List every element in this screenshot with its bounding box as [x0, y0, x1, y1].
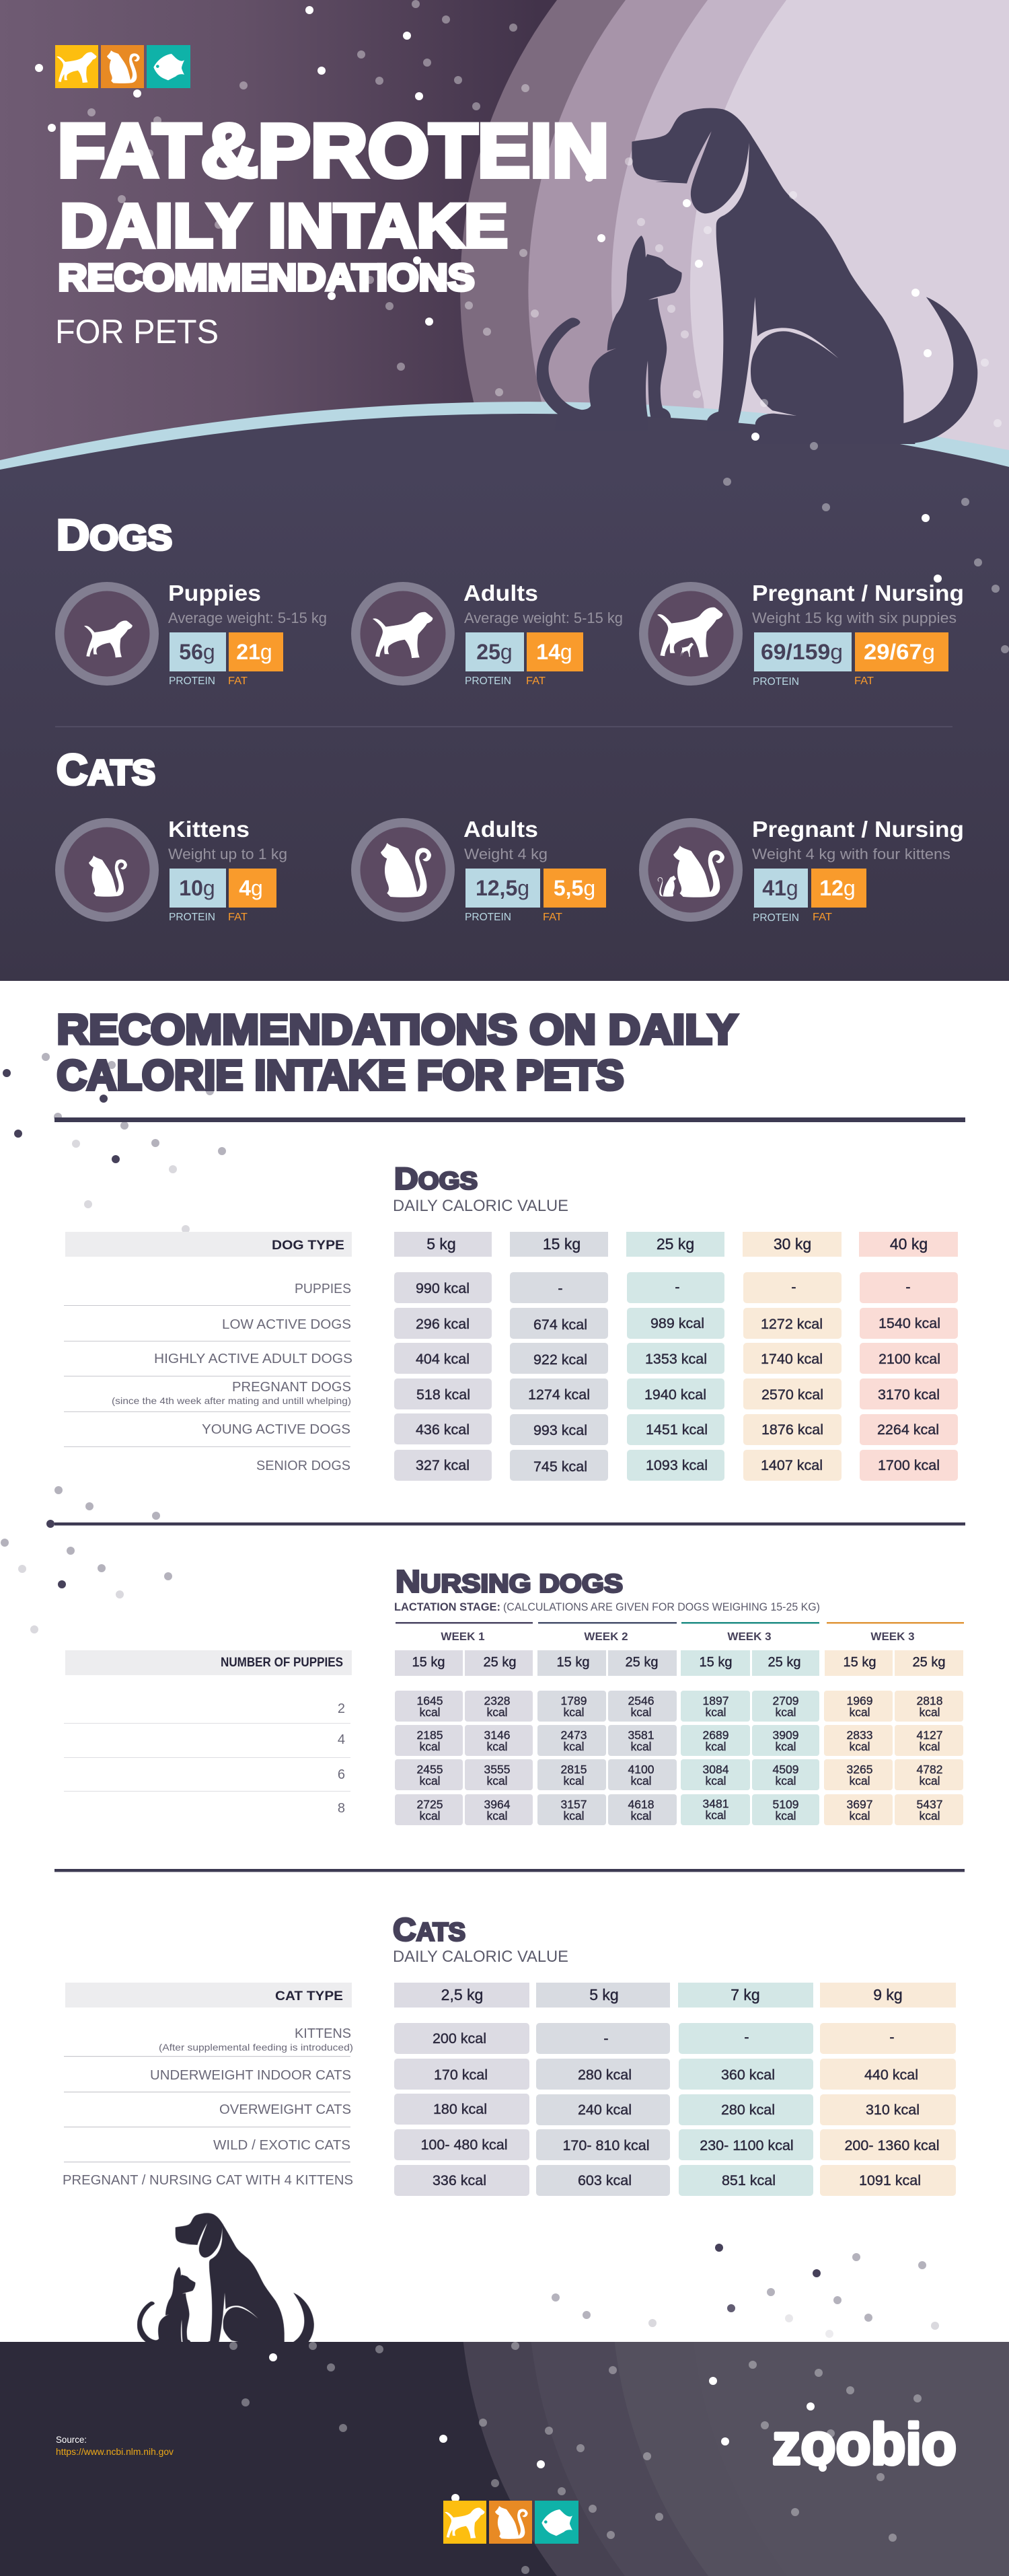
table: pregnant or nursing cat row: PREGNANT / NURSING CAT WITH 4 KITTENS	[63, 2173, 353, 2188]
table: four puppies row: 3909	[773, 1728, 798, 1742]
table: six puppies row: kcal	[775, 1774, 796, 1788]
table: six puppies row: kcal	[486, 1774, 508, 1788]
table: senior dogs row: 745 kcal	[533, 1459, 587, 1475]
table: four puppies row: 4	[338, 1732, 345, 1747]
table: wild and exotic cats row	[213, 2129, 956, 2160]
table: week headers: WEEK 3	[727, 1630, 772, 1643]
table: highly active adult dogs row	[154, 1343, 958, 1374]
table: dogs header row: 15 kg	[543, 1235, 581, 1253]
table: six puppies row: 4509	[773, 1763, 798, 1776]
snow dots on footer	[229, 2342, 922, 2574]
table: low active dogs row	[222, 1308, 958, 1339]
card: kittens: FAT	[228, 912, 248, 923]
table: eight puppies row: 5437	[917, 1798, 942, 1811]
card: adult dogs: 25g	[476, 640, 513, 664]
table: two puppies row: kcal	[419, 1705, 441, 1719]
table: senior dogs row: 1093 kcal	[646, 1457, 708, 1473]
table: dogs header row: 30 kg	[774, 1235, 811, 1253]
table: pregnant dogs row: PREGNANT DOGS	[232, 1380, 351, 1395]
card: pregnant or nursing cats: 12g	[819, 876, 856, 900]
logo: pet icon tiles	[55, 45, 190, 88]
heading: nursing dogs	[394, 1563, 820, 1613]
table: low active dogs row: 989 kcal	[650, 1315, 704, 1331]
panel: footer	[0, 2342, 1009, 2576]
source note: https://www.ncbi.nlm.nih.gov	[56, 2447, 174, 2457]
table: underweight indoor cats row: UNDERWEIGHT INDOOR CATS	[150, 2068, 351, 2083]
table: nursing dogs header row	[65, 1650, 963, 1676]
table: two puppies row: kcal	[630, 1705, 652, 1719]
heading: recommendations on daily calorie intake: CALORIE INTAKE FOR PETS	[57, 1052, 624, 1099]
card: puppies: FAT	[228, 675, 248, 687]
card: pregnant or nursing dogs: 29/67g	[864, 640, 935, 664]
table: eight puppies row: 3481	[703, 1797, 728, 1810]
card: adult cats	[351, 817, 606, 923]
table: two puppies row: 1897	[703, 1694, 728, 1707]
table: puppies row: -	[791, 1279, 796, 1295]
logo: zoobio wordmark: zoobio	[772, 2413, 957, 2477]
table: young active dogs row: 1451 kcal	[646, 1422, 708, 1438]
table: eight puppies row: kcal	[630, 1809, 652, 1823]
heading: cats table: CATS	[393, 1912, 465, 1948]
table: wild and exotic cats row: 200- 1360 kcal	[844, 2137, 940, 2154]
table: young active dogs row: YOUNG ACTIVE DOGS	[202, 1422, 350, 1437]
heading: recommendations on daily calorie intake: RECOMMENDATIONS ON DAILY	[57, 1006, 737, 1054]
card: pregnant or nursing cats: 41g	[762, 876, 798, 900]
table: eight puppies row: 4618	[628, 1798, 654, 1811]
card: kittens: 10g	[179, 876, 215, 900]
table: four puppies row: kcal	[563, 1740, 585, 1753]
table: two puppies row: 2818	[917, 1694, 942, 1707]
table: four puppies row	[338, 1725, 963, 1756]
table: six puppies row: 2455	[417, 1763, 443, 1776]
card: adult cats: 12,5g	[476, 876, 529, 900]
table: two puppies row: kcal	[563, 1705, 585, 1719]
table: low active dogs row: 674 kcal	[533, 1317, 587, 1333]
table: low active dogs row: LOW ACTIVE DOGS	[222, 1317, 351, 1332]
heading: recommendations on daily calorie intake	[57, 1006, 737, 1099]
table: nursing dogs header row: 15 kg	[557, 1655, 589, 1670]
table: wild and exotic cats row: WILD / EXOTIC CATS	[213, 2138, 350, 2153]
table: pregnant dogs row: 518 kcal	[416, 1387, 470, 1403]
heading: nursing dogs: NURSING DOGS	[396, 1563, 623, 1598]
card: adult dogs: PROTEIN	[465, 675, 511, 687]
title: for pets: FOR PETS	[55, 313, 219, 351]
table: four puppies row: kcal	[419, 1740, 441, 1753]
table: four puppies row: kcal	[705, 1740, 726, 1753]
table: nursing dogs header row: 25 kg	[768, 1655, 800, 1670]
table: dogs header row: 5 kg	[426, 1235, 456, 1253]
table: highly active adult dogs row: 2100 kcal	[879, 1351, 940, 1367]
table: underweight indoor cats row: 360 kcal	[721, 2067, 775, 2083]
card: kittens: PROTEIN	[169, 912, 215, 923]
table: cats header row: CAT TYPE	[275, 1989, 343, 2003]
card: adult cats: Adults	[463, 817, 538, 842]
card: adult dogs: FAT	[526, 675, 546, 687]
table: overweight cats row: 240 kcal	[578, 2102, 632, 2118]
title: daily intake: DAILY INTAKE	[60, 192, 508, 260]
panel: hero header	[0, 0, 1009, 484]
table: cats header row: 2,5 kg	[441, 1986, 483, 2003]
snow dots on white page	[1, 1053, 939, 2338]
table: nursing dogs header row: 25 kg	[484, 1655, 516, 1670]
card: adult dogs: 14g	[536, 640, 572, 664]
table: four puppies row: kcal	[630, 1740, 652, 1753]
table: pregnant or nursing cat row: 1091 kcal	[859, 2172, 921, 2188]
table: four puppies row: kcal	[849, 1740, 870, 1753]
table: kittens row	[159, 2023, 956, 2054]
table: highly active adult dogs row: 922 kcal	[533, 1352, 587, 1368]
table: dogs header row: 40 kg	[890, 1235, 928, 1253]
table: cats header row: 5 kg	[589, 1986, 619, 2003]
table: eight puppies row: 8	[338, 1801, 345, 1816]
table: four puppies row: 4127	[917, 1728, 942, 1742]
table: two puppies row: kcal	[849, 1705, 870, 1719]
table: puppies row: PUPPIES	[295, 1282, 351, 1296]
table: low active dogs row: 1272 kcal	[761, 1316, 823, 1332]
table: pregnant or nursing cat row: 603 kcal	[578, 2172, 632, 2188]
table: pregnant or nursing cat row: 336 kcal	[433, 2172, 486, 2188]
table: young active dogs row: 993 kcal	[533, 1422, 587, 1438]
table: six puppies row: 3555	[484, 1763, 510, 1776]
table: two puppies row: 1969	[847, 1694, 872, 1707]
source note: Source:	[56, 2435, 87, 2445]
table: puppies row: -	[675, 1279, 680, 1295]
heading: cats: CATS	[57, 745, 155, 794]
table: four puppies row: kcal	[919, 1740, 940, 1753]
table: nursing dogs header row: 15 kg	[844, 1655, 876, 1670]
heading: cats table	[393, 1912, 568, 1966]
table: senior dogs row: 1700 kcal	[878, 1457, 940, 1473]
table: young active dogs row: 1876 kcal	[761, 1422, 823, 1438]
logo: footer pet icon tiles	[443, 2501, 578, 2544]
card: pregnant or nursing dogs: PROTEIN	[753, 676, 799, 688]
heading: cats table: DAILY CALORIC VALUE	[393, 1948, 568, 1966]
heading: dogs table: DAILY CALORIC VALUE	[393, 1197, 568, 1215]
table: underweight indoor cats row: 440 kcal	[864, 2067, 918, 2083]
card: kittens: Kittens	[168, 817, 250, 842]
table: two puppies row: 2709	[773, 1694, 798, 1707]
table: eight puppies row: kcal	[849, 1809, 870, 1823]
table: overweight cats row: 180 kcal	[433, 2101, 487, 2117]
table: eight puppies row: 3157	[561, 1798, 587, 1811]
table: puppies row: -	[905, 1279, 911, 1295]
table: kittens row: 200 kcal	[433, 2030, 486, 2047]
table: eight puppies row: kcal	[775, 1809, 796, 1823]
table: eight puppies row: 2725	[417, 1798, 443, 1811]
table: two puppies row: kcal	[775, 1705, 796, 1719]
table: six puppies row: 3265	[847, 1763, 872, 1776]
table: six puppies row: kcal	[563, 1774, 585, 1788]
table: two puppies row: 1645	[417, 1694, 443, 1707]
card: pregnant or nursing cats: Pregnant / Nursing	[752, 817, 964, 842]
table: eight puppies row: 5109	[773, 1798, 798, 1811]
table: nursing dogs header row: 25 kg	[913, 1655, 945, 1670]
card: puppies: 21g	[236, 640, 272, 664]
table: kittens row: KITTENS	[295, 2026, 351, 2041]
table: eight puppies row: kcal	[919, 1809, 940, 1823]
table: two puppies row: 1789	[561, 1694, 587, 1707]
card: pregnant or nursing dogs	[639, 581, 964, 688]
table: two puppies row: 2328	[484, 1694, 510, 1707]
table: four puppies row: 2473	[561, 1728, 587, 1742]
table: dogs header row	[65, 1232, 958, 1257]
table: dogs header row: 25 kg	[657, 1235, 694, 1253]
table: two puppies row: 2546	[628, 1694, 654, 1707]
table: highly active adult dogs row: HIGHLY ACTIVE ADULT DOGS	[154, 1352, 352, 1366]
panel: dark nutrition section	[0, 414, 1009, 981]
card: kittens: 4g	[239, 876, 263, 900]
card: adult cats: Weight 4 kg	[464, 846, 548, 862]
card: puppies	[55, 581, 327, 687]
card: adult dogs: Adults	[463, 581, 538, 605]
table: six puppies row: 4782	[917, 1763, 942, 1776]
table: pregnant dogs row: (since the 4th week after mating and untill whelping)	[112, 1395, 351, 1406]
table: four puppies row: kcal	[775, 1740, 796, 1753]
table: puppies row: 990 kcal	[416, 1280, 470, 1296]
table: senior dogs row: SENIOR DOGS	[256, 1459, 350, 1473]
table: low active dogs row: 1540 kcal	[879, 1315, 940, 1331]
card: pregnant or nursing cats: PROTEIN	[753, 912, 799, 924]
source note	[56, 2435, 174, 2457]
table: pregnant dogs row: 3170 kcal	[878, 1387, 940, 1403]
table: dogs header row: DOG TYPE	[272, 1239, 344, 1253]
table: eight puppies row: kcal	[486, 1809, 508, 1823]
table: eight puppies row: 3964	[484, 1798, 511, 1811]
heading: dogs: DOGS	[57, 511, 172, 559]
snow dots on header and dark section	[35, 0, 1009, 653]
table: four puppies row: kcal	[486, 1740, 508, 1753]
table: underweight indoor cats row: 170 kcal	[434, 2067, 488, 2083]
table: cats header row: 9 kg	[873, 1986, 903, 2003]
card: adult dogs	[351, 581, 623, 687]
table: overweight cats row: OVERWEIGHT CATS	[219, 2102, 351, 2117]
table: week headers	[396, 1622, 964, 1643]
card: pregnant or nursing dogs: Weight 15 kg with six puppies	[752, 610, 957, 626]
table: pregnant dogs row: 2570 kcal	[761, 1387, 823, 1403]
table: nursing dogs header row: 25 kg	[626, 1655, 658, 1670]
table: four puppies row: 3581	[628, 1728, 654, 1742]
card: adult cats: 5,5g	[554, 876, 595, 900]
table: nursing dogs header row: 15 kg	[412, 1655, 445, 1670]
card: adult cats: PROTEIN	[465, 912, 511, 923]
table: cats header row: 7 kg	[731, 1986, 760, 2003]
card: pregnant or nursing cats: FAT	[813, 912, 832, 923]
table: two puppies row	[338, 1691, 963, 1722]
table: young active dogs row	[202, 1413, 958, 1445]
table: week headers: WEEK 3	[870, 1630, 915, 1643]
table: wild and exotic cats row: 100- 480 kcal	[420, 2137, 508, 2153]
table: cats header row	[65, 1983, 956, 2008]
table: kittens row: -	[889, 2029, 895, 2045]
table: pregnant or nursing cat row	[63, 2165, 956, 2196]
heading: nursing dogs: LACTATION STAGE:	[394, 1600, 500, 1613]
table: low active dogs row: 296 kcal	[416, 1316, 470, 1332]
heading: nursing dogs: (CALCULATIONS ARE GIVEN FOR DOGS WEIGHING 15-25 KG)	[503, 1600, 820, 1613]
table: two puppies row: kcal	[486, 1705, 508, 1719]
table: pregnant dogs row	[112, 1378, 958, 1409]
table: senior dogs row	[256, 1450, 958, 1481]
table: senior dogs row: 327 kcal	[416, 1457, 470, 1473]
heading: dogs table: DOGS	[394, 1161, 478, 1196]
table: overweight cats row: 310 kcal	[866, 2102, 920, 2118]
table: nursing dogs header row: 15 kg	[700, 1655, 732, 1670]
table: six puppies row: 6	[338, 1767, 345, 1782]
card: kittens: Weight up to 1 kg	[168, 846, 287, 862]
table: young active dogs row: 2264 kcal	[877, 1422, 939, 1438]
illustration: small dog and cat silhouette	[137, 2213, 314, 2355]
table: four puppies row: 2185	[417, 1728, 443, 1742]
table: eight puppies row: kcal	[705, 1808, 726, 1822]
table: young active dogs row: 436 kcal	[416, 1422, 470, 1438]
card: pregnant or nursing cats: Weight 4 kg with four kittens	[752, 846, 950, 862]
table: pregnant or nursing cat row: 851 kcal	[722, 2172, 776, 2188]
title: fat and protein: FAT&PROTEIN	[58, 109, 609, 192]
table: eight puppies row: kcal	[419, 1809, 441, 1823]
table: four puppies row: 3146	[484, 1728, 510, 1742]
illustration: dog and cat silhouette	[537, 108, 977, 444]
table: overweight cats row: 280 kcal	[721, 2102, 775, 2118]
card: pregnant or nursing dogs: 69/159g	[761, 640, 843, 664]
table: kittens row: -	[603, 2030, 609, 2047]
table: senior dogs row: 1407 kcal	[761, 1457, 823, 1473]
table: six puppies row	[338, 1759, 963, 1790]
table: four puppies row: 2833	[847, 1728, 872, 1742]
table: wild and exotic cats row: 230- 1100 kcal	[700, 2137, 794, 2154]
table: six puppies row: 3084	[703, 1763, 729, 1776]
table: four puppies row: 2689	[703, 1728, 728, 1742]
table: overweight cats row	[219, 2094, 956, 2125]
title: recommendations: RECOMMENDATIONS	[58, 256, 475, 299]
table: six puppies row: kcal	[705, 1774, 726, 1788]
table: underweight indoor cats row	[150, 2059, 956, 2090]
table: two puppies row: 2	[338, 1701, 345, 1716]
card: pregnant or nursing dogs: Pregnant / Nursing	[752, 581, 964, 605]
table: puppies row: -	[558, 1280, 563, 1296]
card: puppies: Puppies	[168, 581, 261, 605]
card: pregnant or nursing cats	[639, 817, 964, 924]
table: puppies row	[295, 1272, 958, 1303]
table: six puppies row: 4100	[628, 1763, 655, 1776]
table: pregnant dogs row: 1274 kcal	[528, 1387, 590, 1403]
table: eight puppies row: 3697	[847, 1798, 872, 1811]
table: underweight indoor cats row: 280 kcal	[578, 2067, 632, 2083]
card: kittens	[55, 817, 287, 923]
table: six puppies row: kcal	[630, 1774, 652, 1788]
table: highly active adult dogs row: 1740 kcal	[761, 1351, 823, 1367]
table: two puppies row: kcal	[705, 1705, 726, 1719]
card: adult cats: FAT	[543, 912, 562, 923]
card: puppies: Average weight: 5-15 kg	[168, 610, 327, 626]
card: pregnant or nursing dogs: FAT	[854, 675, 874, 687]
table: six puppies row: kcal	[419, 1774, 441, 1788]
table: wild and exotic cats row: 170- 810 kcal	[562, 2137, 650, 2154]
table: week headers: WEEK 2	[584, 1630, 628, 1643]
table: highly active adult dogs row: 404 kcal	[416, 1351, 470, 1367]
table: six puppies row: kcal	[849, 1774, 870, 1788]
card: puppies: PROTEIN	[169, 675, 215, 687]
card: puppies: 56g	[179, 640, 215, 664]
table: eight puppies row	[338, 1794, 963, 1825]
table: eight puppies row: kcal	[563, 1809, 585, 1823]
table: six puppies row: 2815	[561, 1763, 587, 1776]
table: week headers: WEEK 1	[441, 1630, 485, 1643]
table: kittens row: (After supplemental feeding is introduced)	[159, 2042, 353, 2053]
table: two puppies row: kcal	[919, 1705, 940, 1719]
table: pregnant dogs row: 1940 kcal	[644, 1387, 706, 1403]
table: six puppies row: kcal	[919, 1774, 940, 1788]
heading: dogs table	[393, 1161, 568, 1215]
table: highly active adult dogs row: 1353 kcal	[645, 1351, 707, 1367]
card: adult dogs: Average weight: 5-15 kg	[464, 610, 623, 626]
table: nursing dogs header row: NUMBER OF PUPPIES	[221, 1656, 343, 1670]
table: kittens row: -	[744, 2029, 749, 2045]
